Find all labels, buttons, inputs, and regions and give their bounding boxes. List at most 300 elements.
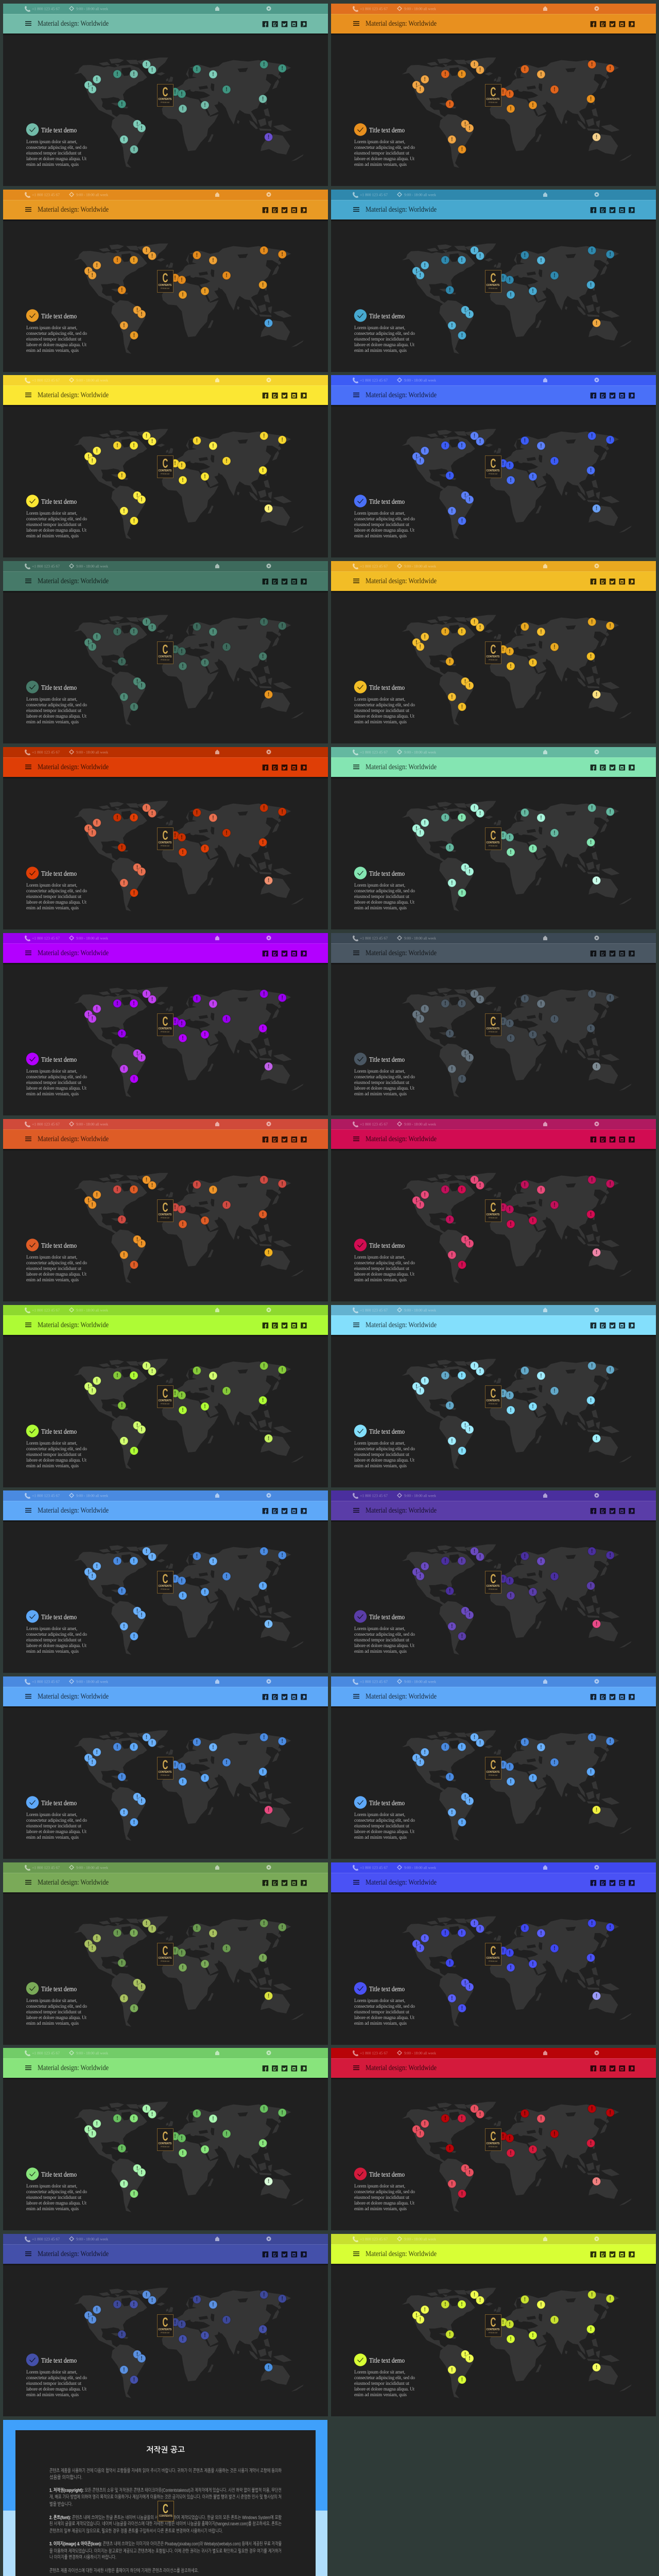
body text: consectetur adipiscing elit, sed do: [26, 2004, 87, 2009]
world map with pins: [74, 1173, 304, 1283]
logo: [485, 2129, 501, 2150]
panel: red-orange map card: [3, 747, 328, 929]
body text: consectetur adipiscing elit, sed do: [354, 1446, 415, 1451]
title with check icon: [26, 309, 77, 322]
header title and social icons: [3, 1873, 328, 1894]
world map with pins: [74, 1917, 304, 2027]
title with check icon: [354, 495, 405, 507]
title with check icon: [26, 867, 77, 879]
body text: consectetur adipiscing elit, sed do: [26, 2375, 87, 2380]
header title and social icons: [3, 2244, 328, 2265]
title with check icon: [354, 309, 405, 322]
top contact bar: +1 800 123 45 67: [360, 1680, 388, 1684]
title with check icon: Title text demo: [41, 1614, 77, 1621]
header title and social icons: Material design: Worldwide: [38, 2064, 109, 2072]
body text: eiusmod tempor incididunt ut: [26, 2009, 81, 2014]
body text: [354, 2369, 415, 2397]
body text: eiusmod tempor incididunt ut: [26, 1823, 81, 1828]
title with check icon: [26, 681, 77, 693]
header title and social icons: Material design: Worldwide: [366, 2064, 437, 2072]
logo: PREMIUM: [161, 2332, 169, 2334]
top contact bar: [3, 561, 328, 571]
body text: eiusmod tempor incididunt ut: [26, 2195, 81, 2200]
top contact bar: +1 800 123 45 67: [32, 564, 60, 569]
title with check icon: Title text demo: [41, 1986, 77, 1993]
body text: consectetur adipiscing elit, sed do: [26, 2189, 87, 2194]
body text: [26, 1812, 87, 1840]
panel: blue map card with yellow pin: [331, 1676, 656, 1859]
header title and social icons: [331, 14, 656, 35]
header title and social icons: Material design: Worldwide: [38, 391, 109, 399]
body text: [26, 2183, 87, 2211]
dark notice box: [15, 2430, 316, 2576]
body text: eiusmod tempor incididunt ut: [354, 1637, 409, 1642]
notice body text: 콘텐츠의 일부 제공되지 않으므로, 필요한 경우 정품 폰트를 구입하셔서 다른 폰트로 변경하여 사용하시기 바랍니다.: [49, 2528, 223, 2534]
title with check icon: Title text demo: [41, 313, 77, 320]
notice body text: 콘텐츠 제품 라이선스에 대한 자세한 사항은 홈페이지 하단에 기재한 콘텐츠 라이선스를 참조하세요.: [49, 2568, 199, 2574]
title with check icon: [26, 1610, 77, 1623]
top contact bar: 9:00 - 18:00 all week: [404, 564, 436, 569]
two-tone blue frame: [3, 2420, 327, 2576]
logo: C: [490, 1200, 496, 1215]
logo: CONTENTS: [159, 98, 172, 101]
top contact bar: [3, 1305, 328, 1315]
body text: labore et dolore magna aliqua. Ut: [354, 156, 414, 161]
body text: [354, 1255, 415, 1282]
title with check icon: Title text demo: [41, 870, 77, 878]
body text: consectetur adipiscing elit, sed do: [26, 888, 87, 893]
panel: dark green map card: [3, 561, 328, 743]
body text: [26, 139, 87, 167]
logo: C: [163, 2502, 168, 2516]
panel: navy indigo map card: [3, 2234, 328, 2416]
body text: enim ad minim veniam, quis: [354, 1277, 407, 1282]
logo: C: [490, 1572, 496, 1586]
header title and social icons: [331, 757, 656, 778]
logo: PREMIUM: [161, 1588, 169, 1590]
world map with pins: [402, 2102, 632, 2212]
logo: C: [490, 2129, 496, 2144]
body text: enim ad minim veniam, quis: [26, 533, 79, 538]
world map with pins: [74, 429, 304, 539]
body text: Lorem ipsum dolor sit amet,: [26, 1626, 77, 1631]
header title and social icons: Material design: Worldwide: [366, 206, 437, 214]
top contact bar: 9:00 - 18:00 all week: [404, 6, 436, 11]
logo: CONTENTS: [159, 841, 172, 844]
logo: C: [490, 1944, 496, 1958]
body text: enim ad minim veniam, quis: [354, 2206, 407, 2211]
body text: enim ad minim veniam, quis: [354, 1649, 407, 1654]
body text: consectetur adipiscing elit, sed do: [354, 702, 415, 707]
logo: [485, 455, 501, 478]
logo: CONTENTS: [486, 98, 500, 101]
top contact bar: +1 800 123 45 67: [360, 2050, 388, 2056]
header title and social icons: Material design: Worldwide: [38, 20, 109, 28]
title with check icon: [26, 2167, 77, 2180]
body text: eiusmod tempor incididunt ut: [26, 150, 81, 156]
title with check icon: Title text demo: [41, 498, 77, 506]
title with check icon: Title text demo: [41, 684, 77, 692]
world map with pins: [402, 1359, 632, 1469]
top contact bar: [3, 190, 328, 200]
body text: consectetur adipiscing elit, sed do: [26, 331, 87, 336]
header title and social icons: Material design: Worldwide: [38, 206, 109, 214]
body text: labore et dolore magna aliqua. Ut: [354, 714, 414, 719]
panel: light green map card: [3, 2048, 328, 2230]
body text: consectetur adipiscing elit, sed do: [26, 145, 87, 150]
title with check icon: [26, 1982, 77, 1995]
body text: [354, 325, 415, 353]
world map with pins: [402, 1731, 632, 1841]
title with check icon: [26, 1239, 77, 1251]
logo: [485, 1571, 501, 1593]
body text: Lorem ipsum dolor sit amet,: [354, 1255, 405, 1260]
body text: enim ad minim veniam, quis: [26, 1835, 79, 1840]
title with check icon: [26, 2353, 77, 2366]
body text: labore et dolore magna aliqua. Ut: [26, 714, 86, 719]
header title and social icons: [331, 2244, 656, 2265]
body text: Lorem ipsum dolor sit amet,: [26, 1069, 77, 1074]
body text: Lorem ipsum dolor sit amet,: [354, 1626, 405, 1631]
body text: eiusmod tempor incididunt ut: [354, 708, 409, 713]
body text: [26, 697, 87, 724]
logo: C: [490, 1386, 496, 1401]
top contact bar: +1 800 123 45 67: [32, 1308, 60, 1313]
title with check icon: Title text demo: [369, 1242, 405, 1250]
header title and social icons: Material design: Worldwide: [366, 391, 437, 399]
panel: sky blue map card: [331, 190, 656, 372]
world map with pins: [74, 1359, 304, 1469]
body text: Lorem ipsum dolor sit amet,: [354, 325, 405, 330]
panel: teal map card: [3, 4, 328, 186]
world map with pins: [402, 615, 632, 725]
header title and social icons: [3, 943, 328, 964]
header title and social icons: [331, 2058, 656, 2079]
top contact bar: [331, 1119, 656, 1129]
title with check icon: Title text demo: [369, 127, 405, 134]
title with check icon: Title text demo: [369, 1428, 405, 1436]
title with check icon: Title text demo: [369, 1614, 405, 1621]
logo: PREMIUM: [161, 1960, 169, 1962]
body text: enim ad minim veniam, quis: [354, 533, 407, 538]
panel: mint map card: [331, 747, 656, 929]
body text: consectetur adipiscing elit, sed do: [26, 516, 87, 521]
body text: [26, 1069, 87, 1096]
panel: violet map card: [3, 933, 328, 1115]
logo: CONTENTS: [159, 1213, 172, 1216]
body text: [354, 1812, 415, 1840]
body text: [354, 2183, 415, 2211]
logo: PREMIUM: [161, 659, 169, 661]
body text: eiusmod tempor incididunt ut: [354, 1080, 409, 1085]
header title and social icons: [331, 385, 656, 406]
title with check icon: [354, 2167, 405, 2180]
logo: CONTENTS: [486, 1585, 500, 1588]
world map with pins: [74, 801, 304, 911]
body text: enim ad minim veniam, quis: [354, 1463, 407, 1468]
header title and social icons: Material design: Worldwide: [38, 1878, 109, 1887]
title with check icon: [354, 681, 405, 693]
logo: CONTENTS: [159, 284, 172, 287]
logo: [158, 1386, 173, 1408]
body text: Lorem ipsum dolor sit amet,: [354, 1812, 405, 1817]
top contact bar: [3, 2048, 328, 2058]
body text: Lorem ipsum dolor sit amet,: [354, 883, 405, 888]
logo: [158, 1014, 173, 1036]
body text: enim ad minim veniam, quis: [26, 2392, 79, 2397]
logo: CONTENTS: [159, 1399, 172, 1402]
logo: C: [490, 85, 496, 99]
header title and social icons: [3, 2058, 328, 2079]
body text: [354, 139, 415, 167]
header title and social icons: [331, 571, 656, 592]
body text: labore et dolore magna aliqua. Ut: [354, 900, 414, 905]
panel: indigo blue map card: [331, 1862, 656, 2045]
top contact bar: [331, 1862, 656, 1873]
body text: labore et dolore magna aliqua. Ut: [354, 1829, 414, 1834]
body text: eiusmod tempor incididunt ut: [354, 1452, 409, 1457]
body text: consectetur adipiscing elit, sed do: [354, 2189, 415, 2194]
logo: C: [163, 828, 168, 843]
world map with pins: [74, 987, 304, 1097]
top contact bar: 9:00 - 18:00 all week: [404, 1680, 436, 1684]
logo: PREMIUM: [489, 1031, 497, 1033]
title with check icon: Title text demo: [369, 2171, 405, 2179]
body text: eiusmod tempor incididunt ut: [354, 2195, 409, 2200]
panel: copyright notice: [3, 2420, 327, 2576]
logo: C: [163, 1572, 168, 1586]
logo: CONTENTS: [159, 2142, 172, 2145]
body text: eiusmod tempor incididunt ut: [354, 894, 409, 899]
body text: enim ad minim veniam, quis: [26, 2206, 79, 2211]
body text: enim ad minim veniam, quis: [354, 1091, 407, 1096]
logo: PREMIUM: [489, 2332, 497, 2334]
title with check icon: [26, 495, 77, 507]
logo: [485, 1757, 501, 1780]
header title and social icons: Material design: Worldwide: [38, 1321, 109, 1329]
title with check icon: Title text demo: [369, 870, 405, 878]
header title and social icons: Material design: Worldwide: [366, 1506, 437, 1515]
body text: labore et dolore magna aliqua. Ut: [26, 1458, 86, 1463]
logo: PREMIUM: [489, 287, 497, 290]
world map with pins: [402, 1545, 632, 1655]
top contact bar: +1 800 123 45 67: [360, 1122, 388, 1126]
logo: [158, 2129, 173, 2150]
logo: C: [163, 1014, 168, 1029]
top contact bar: [331, 1676, 656, 1687]
world map with pins: [402, 244, 632, 354]
logo: CONTENTS: [486, 1213, 500, 1216]
header title and social icons: [3, 385, 328, 406]
body text: Lorem ipsum dolor sit amet,: [26, 1255, 77, 1260]
title with check icon: [26, 1053, 77, 1065]
top contact bar: [331, 375, 656, 385]
body text: eiusmod tempor incididunt ut: [354, 2009, 409, 2014]
body text: labore et dolore magna aliqua. Ut: [354, 2015, 414, 2020]
body text: [354, 1998, 415, 2026]
header title and social icons: Material design: Worldwide: [366, 1692, 437, 1701]
body text: labore et dolore magna aliqua. Ut: [26, 1086, 86, 1091]
body text: Lorem ipsum dolor sit amet,: [354, 1998, 405, 2003]
body text: eiusmod tempor incididunt ut: [354, 1823, 409, 1828]
body text: enim ad minim veniam, quis: [26, 1277, 79, 1282]
logo: C: [490, 271, 496, 285]
title with check icon: Title text demo: [41, 1800, 77, 1807]
body text: labore et dolore magna aliqua. Ut: [26, 528, 86, 533]
top contact bar: [331, 190, 656, 200]
top contact bar: 9:00 - 18:00 all week: [76, 2237, 108, 2241]
body text: labore et dolore magna aliqua. Ut: [26, 2015, 86, 2020]
logo: PREMIUM: [489, 1217, 497, 1219]
body text: [26, 1255, 87, 1282]
logo: [158, 84, 173, 106]
notice body text: 벌을 받습니다.: [49, 2502, 73, 2507]
panel: amber map card: [3, 190, 328, 372]
body text: labore et dolore magna aliqua. Ut: [26, 900, 86, 905]
logo: PREMIUM: [489, 473, 497, 475]
logo: PREMIUM: [489, 1960, 497, 1962]
logo: CONTENTS: [159, 2328, 172, 2331]
top contact bar: [331, 2234, 656, 2244]
header title and social icons: Material design: Worldwide: [38, 1135, 109, 1143]
logo: PREMIUM: [161, 101, 169, 104]
logo: CONTENTS: [486, 1957, 500, 1960]
body text: enim ad minim veniam, quis: [26, 1649, 79, 1654]
body text: consectetur adipiscing elit, sed do: [354, 145, 415, 150]
top contact bar: +1 800 123 45 67: [360, 936, 388, 941]
title with check icon: Title text demo: [41, 2357, 77, 2365]
panel: crimson pink map card: [331, 1119, 656, 1301]
notice body text: [49, 2468, 282, 2574]
body text: eiusmod tempor incididunt ut: [354, 522, 409, 527]
logo: C: [163, 1200, 168, 1215]
top contact bar: 9:00 - 18:00 all week: [76, 750, 108, 754]
body text: consectetur adipiscing elit, sed do: [26, 1446, 87, 1451]
top contact bar: +1 800 123 45 67: [360, 1493, 388, 1498]
top contact bar: 9:00 - 18:00 all week: [76, 564, 108, 569]
top contact bar: +1 800 123 45 67: [360, 1865, 388, 1870]
world map with pins: [74, 2288, 304, 2398]
top contact bar: +1 800 123 45 67: [32, 193, 60, 197]
title with check icon: [26, 123, 77, 136]
body text: Lorem ipsum dolor sit amet,: [354, 2183, 405, 2189]
logo: CONTENTS: [159, 1957, 172, 1960]
logo: PREMIUM: [489, 1403, 497, 1405]
header title and social icons: Material design: Worldwide: [366, 20, 437, 28]
top contact bar: 9:00 - 18:00 all week: [404, 1308, 436, 1313]
body text: Lorem ipsum dolor sit amet,: [26, 1998, 77, 2003]
logo: [485, 1199, 501, 1222]
title with check icon: [354, 1982, 405, 1995]
header title and social icons: [331, 200, 656, 221]
top contact bar: [3, 1490, 328, 1501]
logo: CONTENTS: [486, 841, 500, 844]
logo: CONTENTS: [159, 1027, 172, 1030]
world map with pins: [402, 801, 632, 911]
title with check icon: Title text demo: [41, 1428, 77, 1436]
logo: C: [490, 642, 496, 657]
body text: enim ad minim veniam, quis: [26, 719, 79, 724]
title with check icon: Title text demo: [369, 1056, 405, 1064]
body text: [26, 1998, 87, 2026]
title with check icon: Title text demo: [41, 1242, 77, 1250]
header title and social icons: [3, 1315, 328, 1336]
header title and social icons: [3, 1501, 328, 1522]
top contact bar: 9:00 - 18:00 all week: [76, 1680, 108, 1684]
title with check icon: [26, 1796, 77, 1809]
body text: consectetur adipiscing elit, sed do: [354, 331, 415, 336]
top contact bar: 9:00 - 18:00 all week: [404, 1865, 436, 1870]
top contact bar: [3, 4, 328, 14]
logo: [158, 1943, 173, 1965]
header title and social icons: Material design: Worldwide: [38, 949, 109, 957]
body text: enim ad minim veniam, quis: [354, 2021, 407, 2026]
logo: PREMIUM: [161, 1031, 169, 1033]
title with check icon: [354, 2353, 405, 2366]
body text: labore et dolore magna aliqua. Ut: [354, 528, 414, 533]
header title and social icons: [3, 14, 328, 35]
panel: light cyan map card: [331, 1305, 656, 1487]
logo: CONTENTS: [159, 655, 172, 658]
header title and social icons: Material design: Worldwide: [366, 577, 437, 585]
body text: consectetur adipiscing elit, sed do: [26, 702, 87, 707]
world map with pins: [74, 615, 304, 725]
top contact bar: 9:00 - 18:00 all week: [404, 2050, 436, 2056]
title with check icon: [354, 123, 405, 136]
logo: C: [163, 1944, 168, 1958]
header title and social icons: Material design: Worldwide: [38, 577, 109, 585]
top contact bar: +1 800 123 45 67: [360, 2237, 388, 2241]
body text: Lorem ipsum dolor sit amet,: [26, 2183, 77, 2189]
header title and social icons: Material design: Worldwide: [366, 763, 437, 771]
logo: PREMIUM: [161, 2146, 169, 2148]
header title and social icons: [331, 1129, 656, 1150]
logo: PREMIUM: [489, 101, 497, 104]
body text: Lorem ipsum dolor sit amet,: [26, 1812, 77, 1817]
top contact bar: +1 800 123 45 67: [360, 6, 388, 11]
body text: eiusmod tempor incididunt ut: [26, 1266, 81, 1271]
top contact bar: [3, 747, 328, 757]
top contact bar: +1 800 123 45 67: [32, 936, 60, 941]
top contact bar: +1 800 123 45 67: [360, 564, 388, 569]
body text: [354, 1069, 415, 1096]
body text: enim ad minim veniam, quis: [354, 162, 407, 167]
world map with pins: [402, 2288, 632, 2398]
title with check icon: Title text demo: [41, 2171, 77, 2179]
panel: orange map card: [331, 4, 656, 186]
logo: CONTENTS: [486, 284, 500, 287]
notice heading: 저작권 공고: [146, 2446, 185, 2454]
logo: [158, 2501, 174, 2521]
body text: consectetur adipiscing elit, sed do: [26, 1632, 87, 1637]
header title and social icons: [3, 200, 328, 221]
body text: Lorem ipsum dolor sit amet,: [26, 697, 77, 702]
body text: enim ad minim veniam, quis: [354, 905, 407, 910]
world map with pins: [402, 1173, 632, 1283]
logo: CONTENTS: [159, 469, 172, 472]
title with check icon: Title text demo: [369, 2357, 405, 2365]
body text: eiusmod tempor incididunt ut: [354, 336, 409, 342]
world map with pins: [402, 58, 632, 168]
body text: labore et dolore magna aliqua. Ut: [26, 2386, 86, 2392]
logo: C: [163, 85, 168, 99]
title with check icon: Title text demo: [369, 313, 405, 320]
panel: blue map card with pink pin: [3, 1676, 328, 1859]
body text: [354, 697, 415, 724]
logo: [158, 1571, 173, 1593]
top contact bar: 9:00 - 18:00 all week: [76, 2050, 108, 2056]
top contact bar: +1 800 123 45 67: [360, 378, 388, 382]
